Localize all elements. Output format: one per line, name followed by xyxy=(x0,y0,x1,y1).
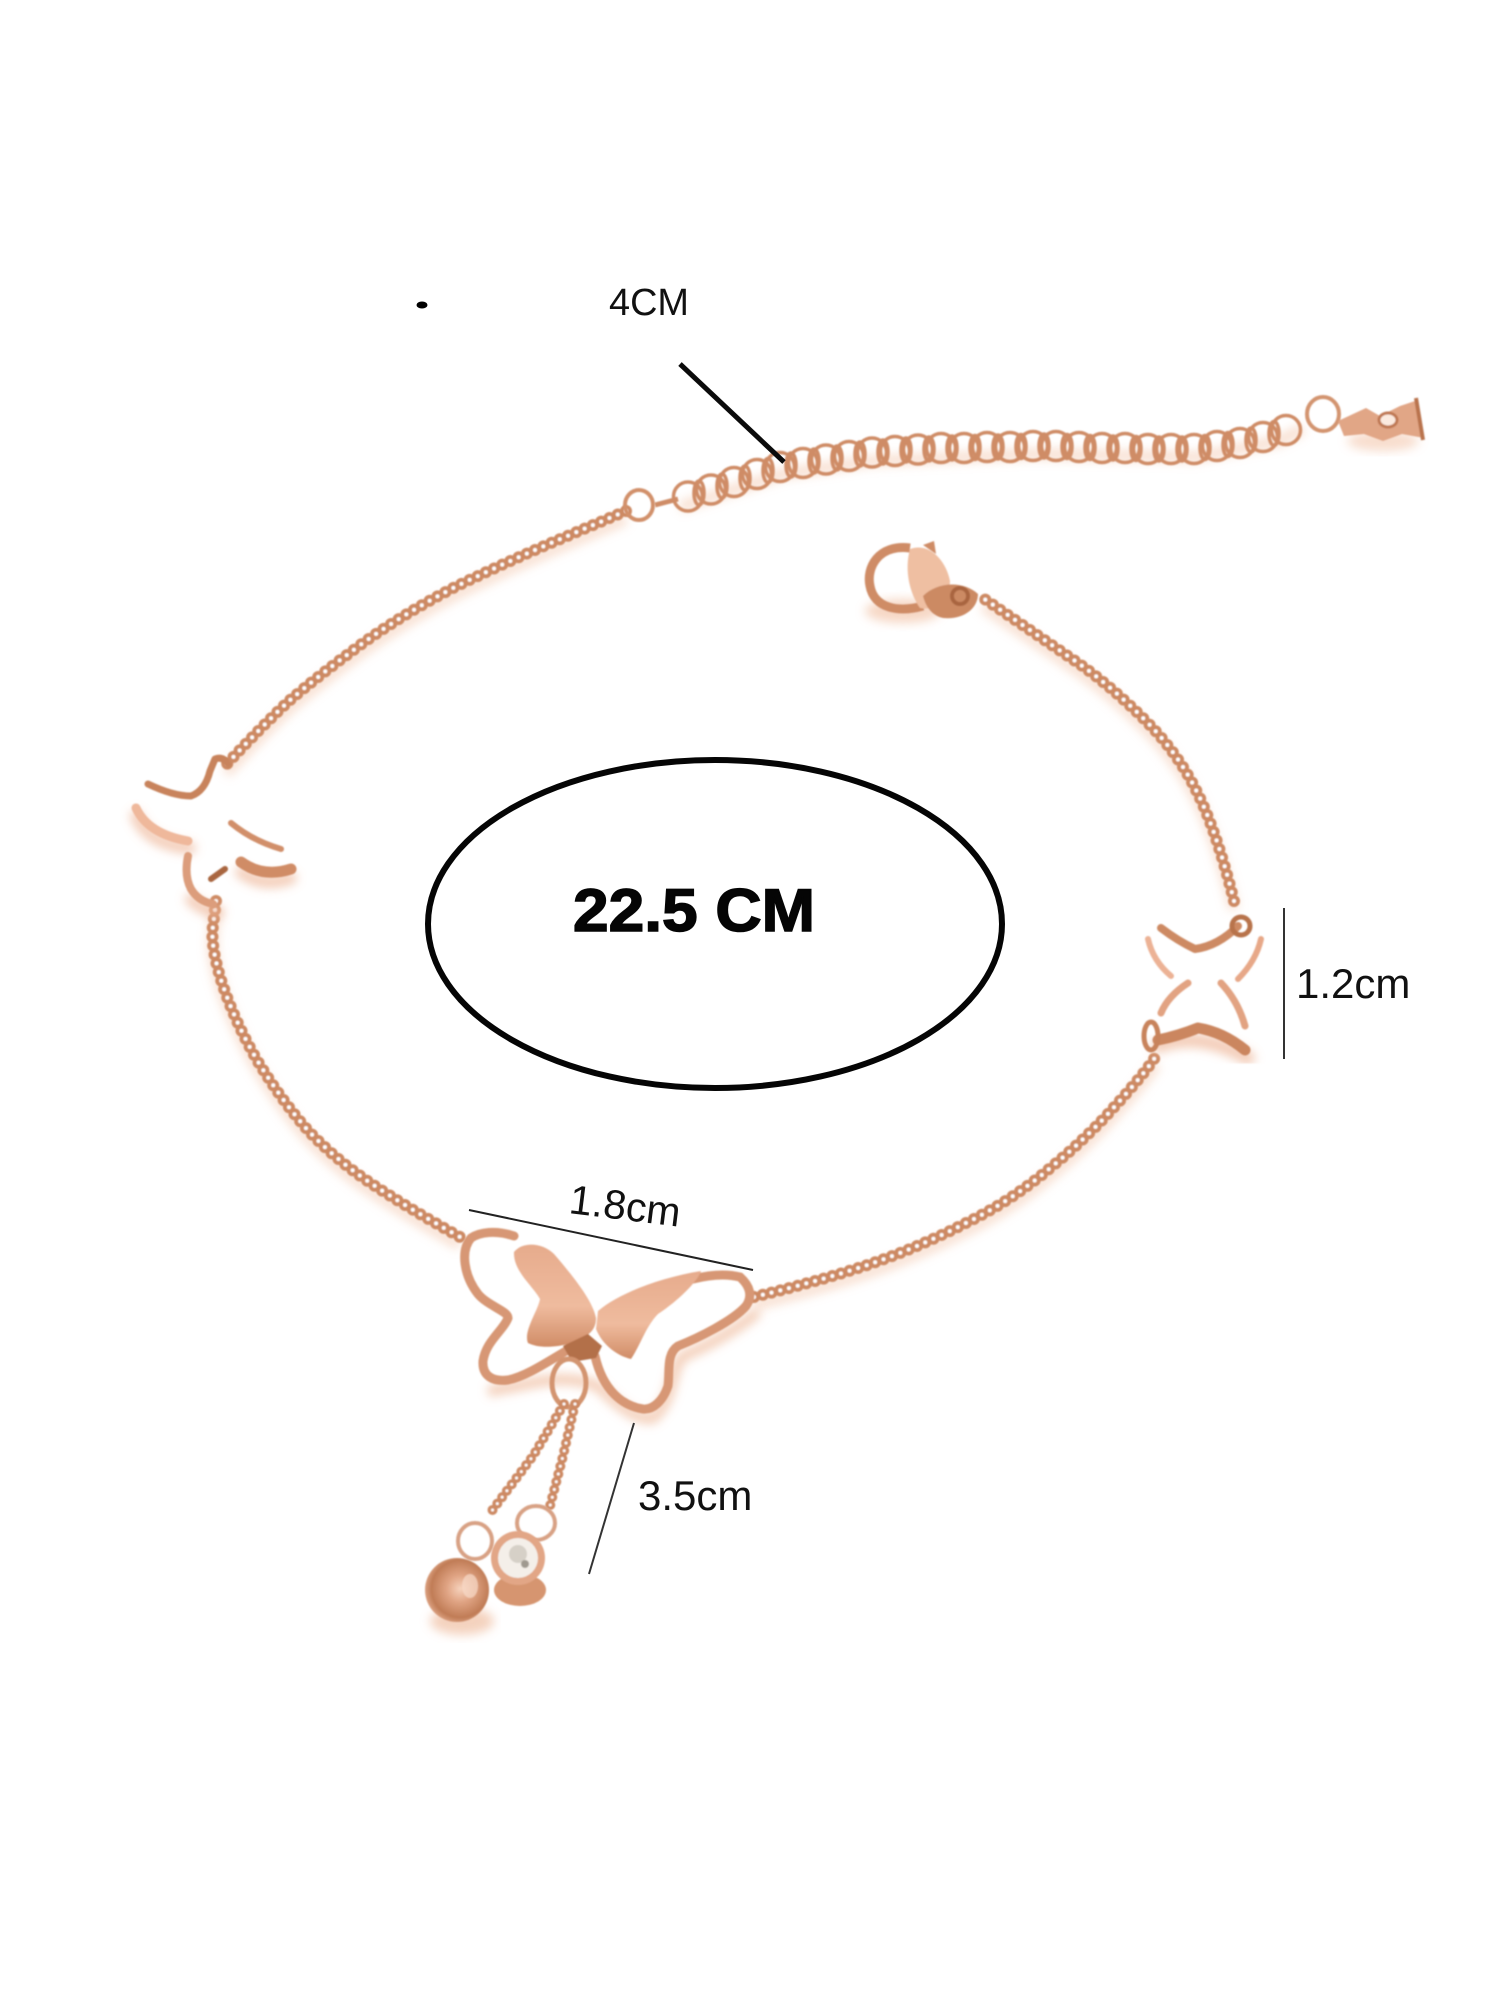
label: 3.5cm: 3.5cm xyxy=(638,1472,752,1519)
tassel rings xyxy=(458,1506,555,1559)
label: 1.8cm: 1.8cm xyxy=(567,1176,683,1236)
butterfly shadow xyxy=(488,1311,758,1418)
leader line: extender xyxy=(680,364,784,462)
butterfly pendant xyxy=(465,1232,758,1418)
total length oval xyxy=(428,760,1002,1088)
dimension line: clover height xyxy=(1283,908,1285,1059)
label: 1.2cm: 1.2cm xyxy=(1296,960,1410,1007)
left clover charm xyxy=(136,758,291,912)
dimension line: tassel length xyxy=(589,1423,634,1574)
extender end ring and tag xyxy=(1307,397,1424,451)
left solid wing xyxy=(514,1245,596,1347)
bracelet xyxy=(136,397,1424,1635)
right clover charm xyxy=(1144,917,1261,1058)
extender ring xyxy=(625,490,653,520)
lobster clasp xyxy=(865,541,978,623)
right wing outline xyxy=(595,1275,750,1409)
dot marker xyxy=(416,302,428,308)
label: total length: 22.5 CM xyxy=(573,877,815,944)
butterfly body xyxy=(563,1334,602,1362)
crystal charm xyxy=(491,1531,546,1606)
ball charm xyxy=(425,1558,494,1635)
chain soft reflections xyxy=(212,429,1303,1305)
right solid wing xyxy=(596,1271,701,1359)
chain: lower left xyxy=(212,901,460,1237)
extender chain xyxy=(655,416,1300,511)
label: 4CM extender: 4CM xyxy=(609,282,689,324)
tassel chains xyxy=(488,1404,575,1516)
left wing outline xyxy=(465,1232,578,1380)
chain: upper left xyxy=(226,511,626,765)
dimension line: butterfly width xyxy=(469,1210,753,1270)
tassel loop xyxy=(552,1359,586,1407)
chain: upper right xyxy=(983,598,1234,901)
chain: lower right xyxy=(754,1056,1156,1297)
